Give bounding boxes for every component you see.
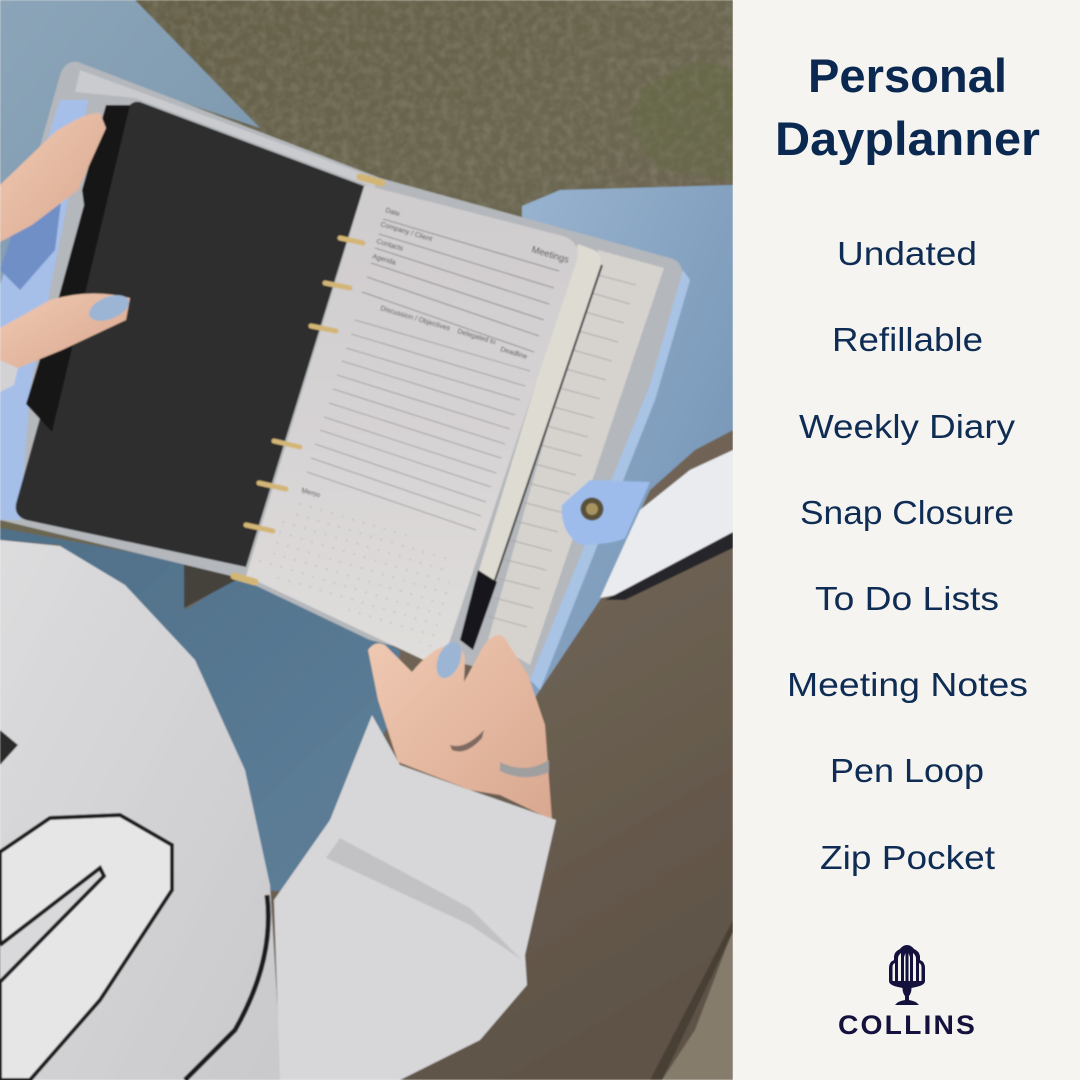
hand: upper left fingers (0, 113, 133, 392)
side panel (733, 0, 1080, 1080)
ground shadow beside knee (184, 564, 240, 608)
denim leg right (520, 185, 733, 705)
feature list: Zip Pocket (820, 839, 995, 876)
photo: planner held on lap (0, 0, 733, 1080)
sweatshirt body (0, 540, 282, 1080)
page labels: Company / Client (379, 221, 433, 243)
ruled lines (362, 219, 559, 352)
feature list: Undated (837, 235, 977, 272)
black index tab (26, 105, 130, 432)
icon: fountain tree (889, 945, 925, 1005)
feature list: Meeting Notes (787, 666, 1028, 703)
feature list: Refillable (832, 321, 983, 358)
feature list (787, 235, 1028, 876)
sneaker (600, 450, 733, 600)
black page tab (460, 570, 497, 650)
meetings page (246, 185, 578, 664)
denim lap centre (0, 528, 400, 892)
title (775, 49, 1040, 165)
right inner page (487, 250, 664, 665)
page labels: Agenda (371, 253, 397, 267)
stacked pages edge (470, 244, 601, 600)
page labels: Discussion / Objectives (379, 305, 451, 333)
denim leg top left (0, 0, 260, 320)
wordmark: COLLINS (838, 1010, 977, 1040)
ground pavement (0, 0, 733, 1080)
page labels: Meetings (530, 244, 570, 266)
left mark (0, 730, 18, 765)
title: Personal (808, 49, 1007, 102)
gold binder rings (234, 177, 382, 582)
hand: lower holding planner (368, 635, 552, 820)
sweatshirt sleeve (274, 715, 556, 1080)
page labels: Deadline (499, 346, 528, 361)
planner cover (0, 62, 690, 690)
black seam (185, 895, 268, 1080)
feature list: Weekly Diary (799, 408, 1016, 445)
page labels: Delegated to (456, 328, 497, 346)
feature list: Snap Closure (800, 494, 1014, 531)
snap strap (562, 480, 650, 545)
title: Dayplanner (775, 112, 1040, 165)
sweatshirt applique (0, 815, 172, 1080)
applique inner stripe (0, 868, 104, 982)
page labels: Memo (300, 487, 321, 499)
page labels: Date (384, 207, 401, 218)
feature list: Pen Loop (830, 752, 984, 789)
page gutter (490, 265, 602, 595)
page labels (300, 207, 570, 499)
black divider card (16, 102, 364, 567)
page labels: Contacts (375, 238, 404, 253)
feature list: To Do Lists (815, 580, 999, 617)
logo: Collins tree and wordmark (838, 945, 977, 1040)
